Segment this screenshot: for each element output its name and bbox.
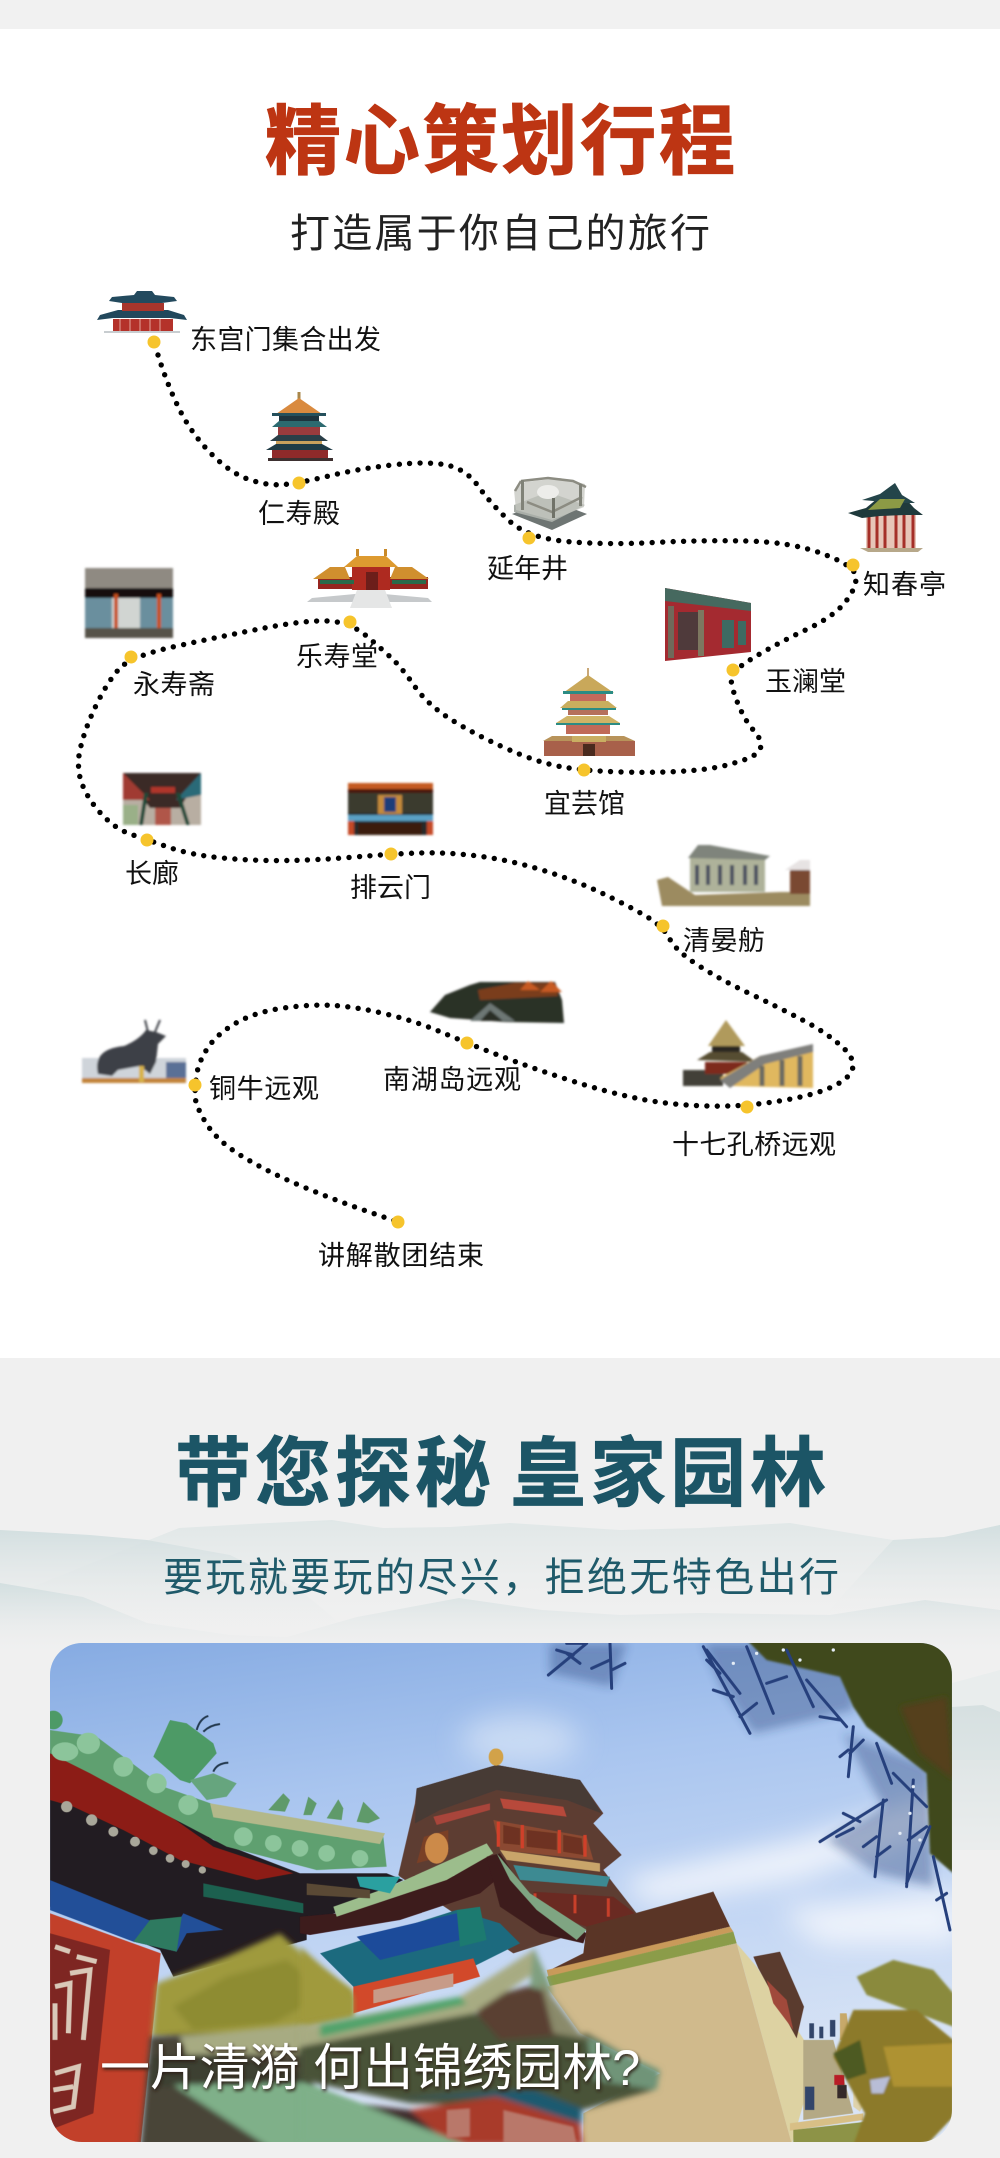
icon: hall of happiness and longevity — [307, 549, 432, 608]
painted beams — [320, 1910, 520, 1990]
stop labels: 乐寿堂 — [296, 642, 378, 672]
mountains backdrop — [0, 1520, 1000, 1850]
people — [805, 2020, 835, 2110]
pagoda — [398, 1765, 637, 1953]
green tiles — [50, 1730, 387, 1870]
stop labels: 铜牛远观 — [209, 1074, 319, 1104]
stairs — [803, 2040, 853, 2120]
stop labels: 长廊 — [125, 859, 179, 889]
photo: longevity studio — [85, 568, 173, 638]
second roof — [300, 1853, 500, 1935]
heading: royal gardens: 带您探秘 皇家园林 — [175, 1432, 830, 1517]
photo panel: Summer Palace — [44, 1640, 960, 2150]
roof beasts — [268, 1793, 380, 1823]
stop labels: 讲解散团结束 — [318, 1241, 484, 1271]
tree — [152, 1933, 353, 2043]
stop labels: 十七孔桥远观 — [672, 1130, 836, 1160]
pine haze — [550, 1643, 933, 1887]
pine needles — [548, 1643, 950, 1930]
section 2 background — [0, 1358, 1000, 2158]
photo: seventeen arch bridge — [683, 1020, 813, 1088]
photo: marble boat — [657, 845, 810, 906]
pine — [747, 1640, 953, 1873]
photo: bronze ox — [82, 1020, 186, 1083]
sub heading: itinerary: 打造属于你自己的旅行 — [290, 212, 710, 256]
stop labels — [125, 325, 946, 1271]
photo: south lake island — [430, 981, 564, 1023]
finial — [489, 1748, 503, 1766]
parapet and wall — [550, 1892, 730, 1970]
sub heading: royal gardens: 要玩就要玩的尽兴，拒绝无特色出行 — [163, 1556, 839, 1600]
icon: hall of benevolence tower — [266, 392, 333, 461]
heading: itinerary title: 精心策划行程 — [265, 100, 735, 185]
top grey band — [0, 0, 1000, 29]
icon: art hall tower — [543, 668, 635, 756]
stop labels: 仁寿殿 — [258, 499, 340, 529]
stop labels: 排云门 — [350, 873, 431, 903]
foreground blur left — [140, 2023, 457, 2150]
red panel — [353, 1958, 480, 2013]
dark eaves — [50, 1750, 403, 1977]
side wall — [737, 1943, 804, 2145]
red pillar with lattice — [50, 1913, 161, 2150]
clouds — [460, 1714, 960, 1945]
sky — [50, 1643, 952, 2142]
right wing — [487, 1853, 587, 1943]
stop labels: 宜芸馆 — [544, 789, 625, 819]
building group (centre) — [300, 1748, 792, 2145]
route: dotted path — [78, 355, 856, 1222]
rafter dots — [61, 1801, 206, 1874]
stop labels: 永寿斋 — [133, 670, 215, 700]
building group (right half) — [548, 1640, 953, 2145]
stop labels: 南湖岛远观 — [383, 1065, 521, 1095]
stop labels: 东宫门集合出发 — [190, 325, 381, 355]
icon: spring pavilion — [848, 483, 923, 552]
stop labels: 玉澜堂 — [765, 667, 846, 697]
building group (left half) — [44, 1711, 457, 2150]
blue band — [50, 1880, 223, 1952]
icon: well of longevity — [512, 478, 587, 530]
dragon heads — [153, 1720, 217, 1783]
photo: cloud dispelling gate — [348, 783, 433, 835]
stop labels: 知春亭 — [863, 570, 946, 600]
icon: jade billow hall — [665, 588, 751, 661]
stop labels: 清晏舫 — [683, 926, 765, 956]
photo: long corridor — [123, 773, 201, 825]
foreground roof, blurred — [300, 1947, 660, 2145]
icon: east palace gate — [97, 291, 187, 333]
yellow trees — [833, 1960, 953, 2145]
photo caption: 一片清漪 何出锦绣园林? — [100, 2040, 640, 2096]
stop markers: yellow dots — [124, 336, 860, 1228]
stop labels: 延年井 — [487, 554, 568, 584]
tree edge — [300, 1947, 353, 2023]
